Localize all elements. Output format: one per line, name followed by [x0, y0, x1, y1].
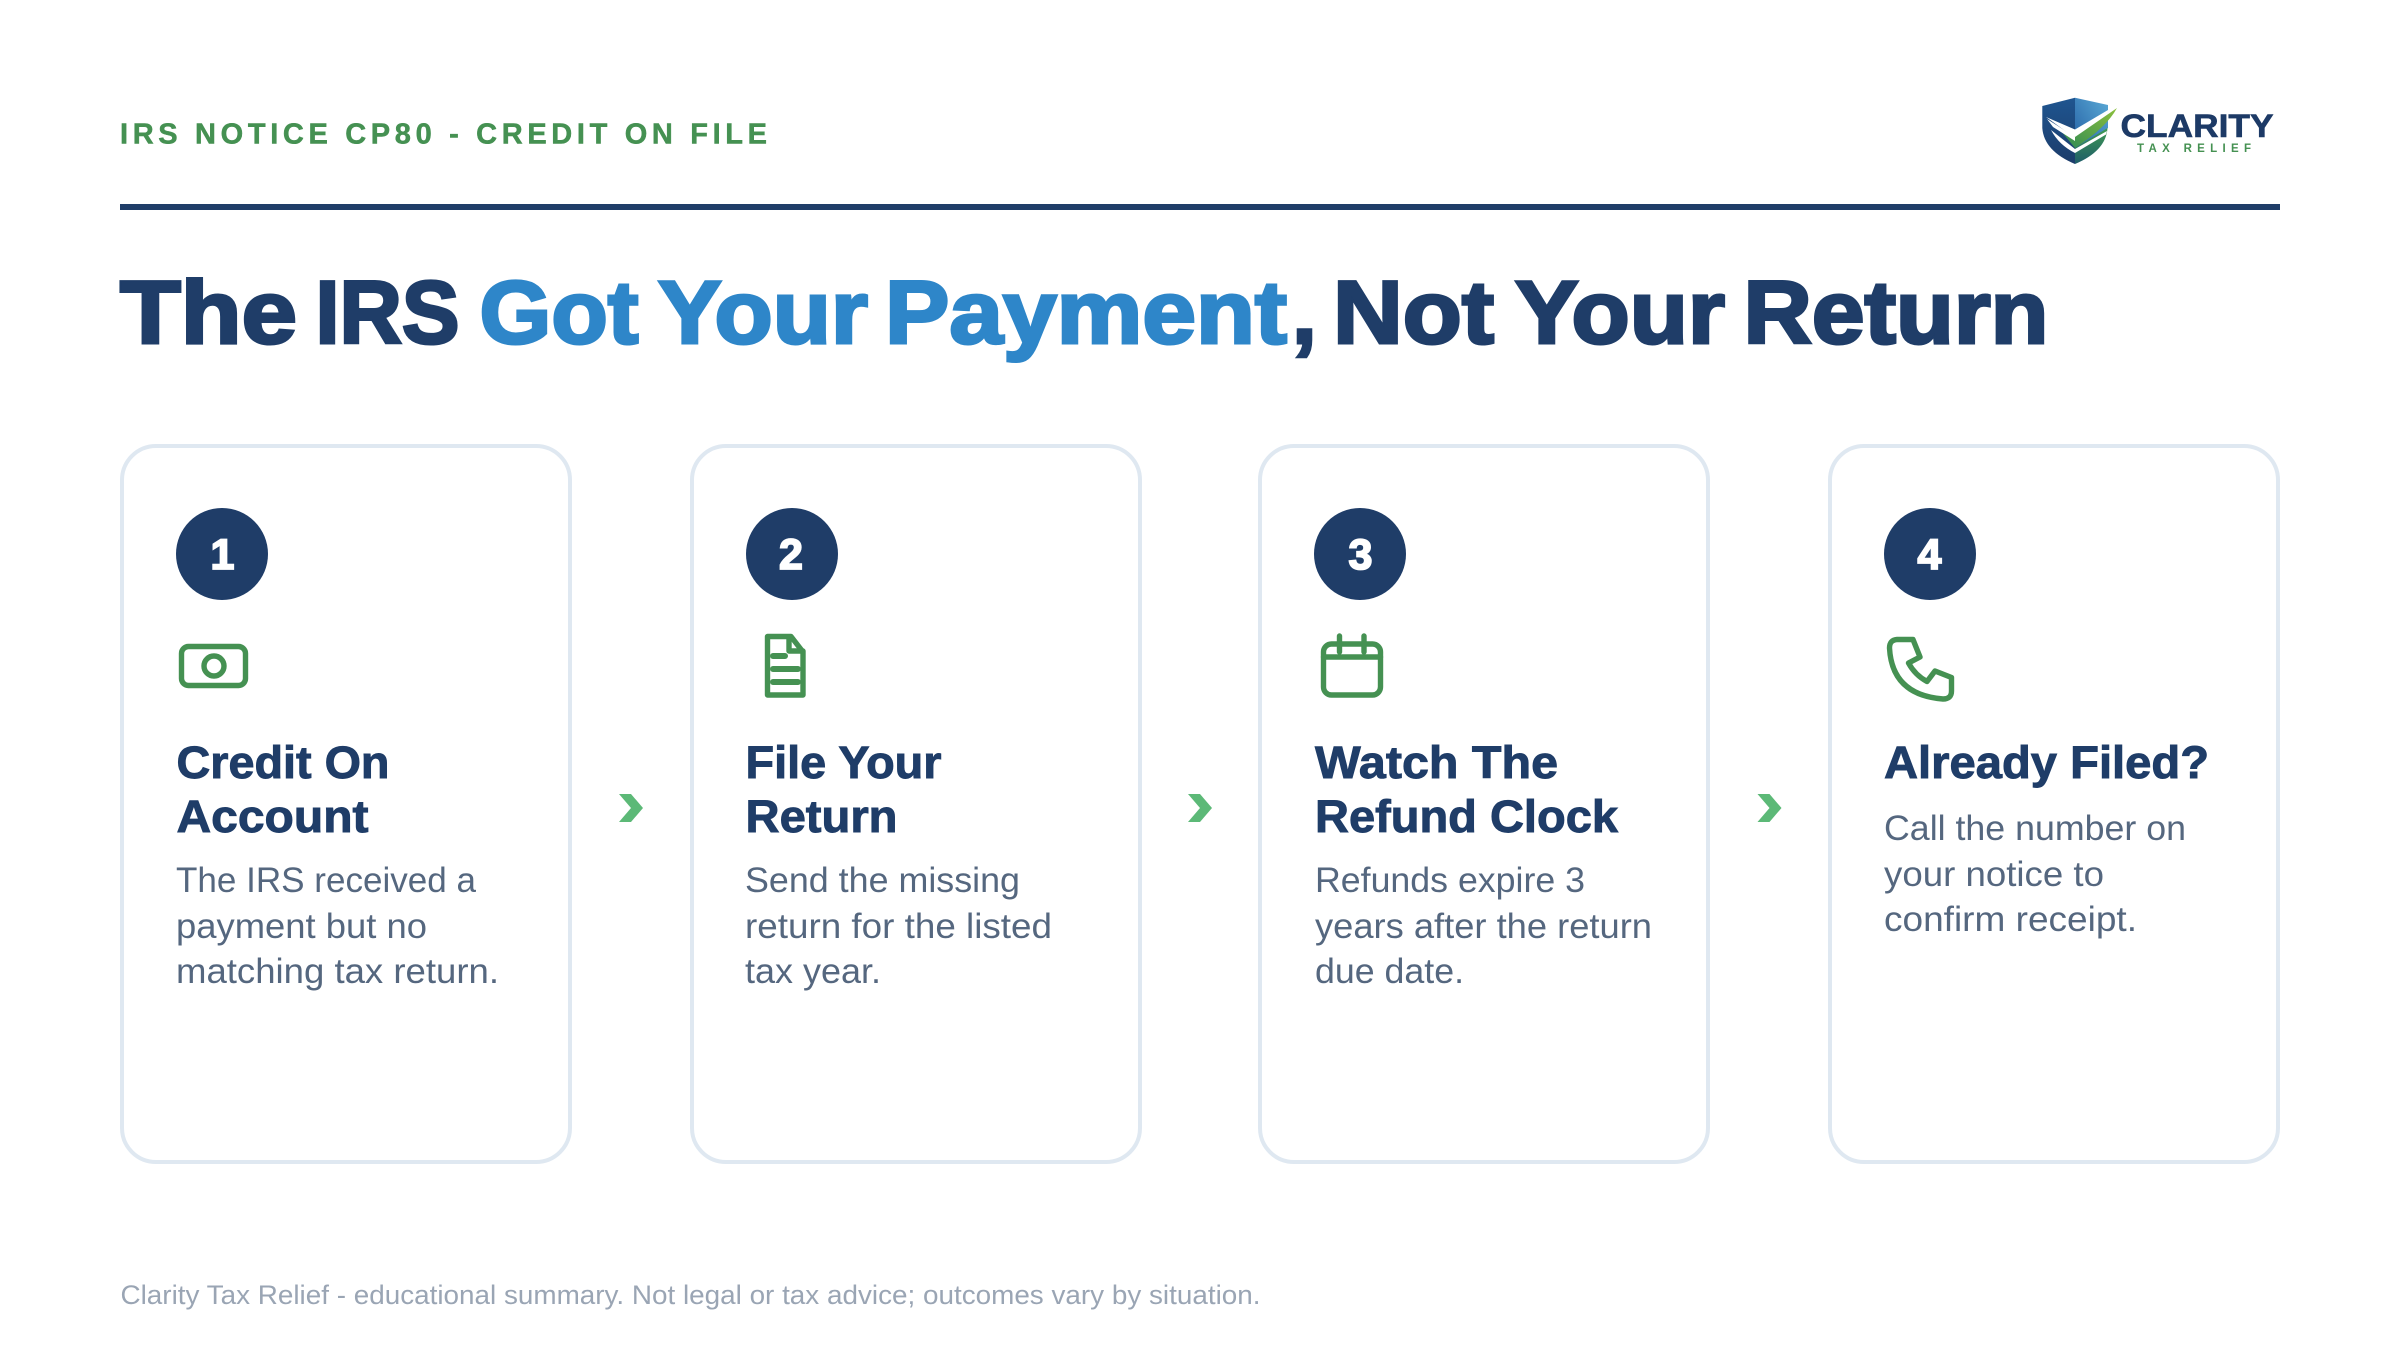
- title: Not: [1333, 262, 1494, 362]
- step 2 description: return for the listed: [745, 907, 1052, 946]
- step 3 description: [1315, 861, 1652, 991]
- step 4 description: [1884, 809, 2186, 939]
- step 2 heading: [746, 737, 942, 842]
- logo: Clarity Tax Relief: [2042, 98, 2274, 164]
- title: The: [120, 262, 297, 362]
- step 1 description: matching tax return.: [176, 952, 499, 991]
- step number 1: [176, 508, 268, 600]
- icon: banknote: [182, 646, 246, 686]
- panel: step 1 credit on account: [122, 446, 570, 1162]
- step number 4: [1884, 508, 1976, 600]
- panel: step 4 already filed: [1830, 446, 2278, 1162]
- step number 3: [1314, 508, 1406, 600]
- icon: phone: [1890, 640, 1952, 699]
- panel: step 2 file your return: [692, 446, 1140, 1162]
- icon: calendar: [1324, 636, 1380, 695]
- step 3 description: due date.: [1315, 952, 1464, 991]
- step 4 heading: Already Filed?: [1884, 737, 2209, 788]
- icon: document: [768, 636, 803, 695]
- step 2 description: tax year.: [745, 952, 881, 991]
- title: Your: [658, 262, 868, 362]
- title: ,: [1292, 262, 1317, 362]
- step 3 heading: [1315, 737, 1619, 842]
- step number 2: 2: [779, 531, 803, 579]
- step 1 description: [176, 861, 499, 991]
- step number 3: 3: [1349, 531, 1372, 579]
- step 3 heading: Refund Clock: [1315, 791, 1619, 842]
- step 4 description: confirm receipt.: [1884, 900, 2137, 939]
- arrow: step 2 to 3: [1188, 794, 1212, 822]
- title: IRS: [316, 262, 460, 362]
- logo: Clarity Tax Relief: TAX RELIEF: [2137, 143, 2251, 155]
- step 3 heading: Watch The: [1315, 737, 1558, 788]
- logo: Clarity Tax Relief: CLARITY: [2120, 108, 2274, 144]
- step 1 description: The IRS received a: [176, 861, 477, 900]
- title: Return: [1744, 262, 2048, 362]
- step number 2: [746, 508, 838, 600]
- eyebrow: notice label: IRS NOTICE CP80 - CREDIT ON FILE: [120, 118, 767, 150]
- step 1 heading: Credit On: [176, 737, 390, 788]
- step 1 description: payment but no: [176, 907, 427, 946]
- panel: step 3 watch the refund clock: [1260, 446, 1708, 1162]
- arrow: step 1 to 2: [619, 794, 643, 822]
- step 1 heading: [176, 737, 390, 842]
- title: Payment: [885, 262, 1287, 362]
- step 2 description: Send the missing: [745, 861, 1020, 900]
- step 2 heading: File Your: [746, 737, 942, 788]
- header rule: [120, 204, 2280, 210]
- step 4 description: Call the number on: [1884, 809, 2186, 848]
- step 3 description: Refunds expire 3: [1315, 861, 1585, 900]
- step 1 heading: Account: [176, 791, 369, 842]
- step 3 description: years after the return: [1315, 907, 1652, 946]
- step 2 description: [745, 861, 1052, 991]
- step number 4: 4: [1918, 531, 1942, 579]
- step number 1: 1: [211, 531, 234, 579]
- title: Got: [480, 262, 638, 362]
- title: [120, 262, 2048, 362]
- title: Your: [1515, 262, 1725, 362]
- step 2 heading: Return: [746, 791, 898, 842]
- arrow: step 3 to 4: [1758, 794, 1782, 822]
- step 4 description: your notice to: [1884, 855, 2104, 894]
- footer disclaimer: Clarity Tax Relief - educational summary. Not legal or tax advice; outcomes vary by situation.: [120, 1280, 1260, 1310]
- logo shield: [2042, 98, 2117, 164]
